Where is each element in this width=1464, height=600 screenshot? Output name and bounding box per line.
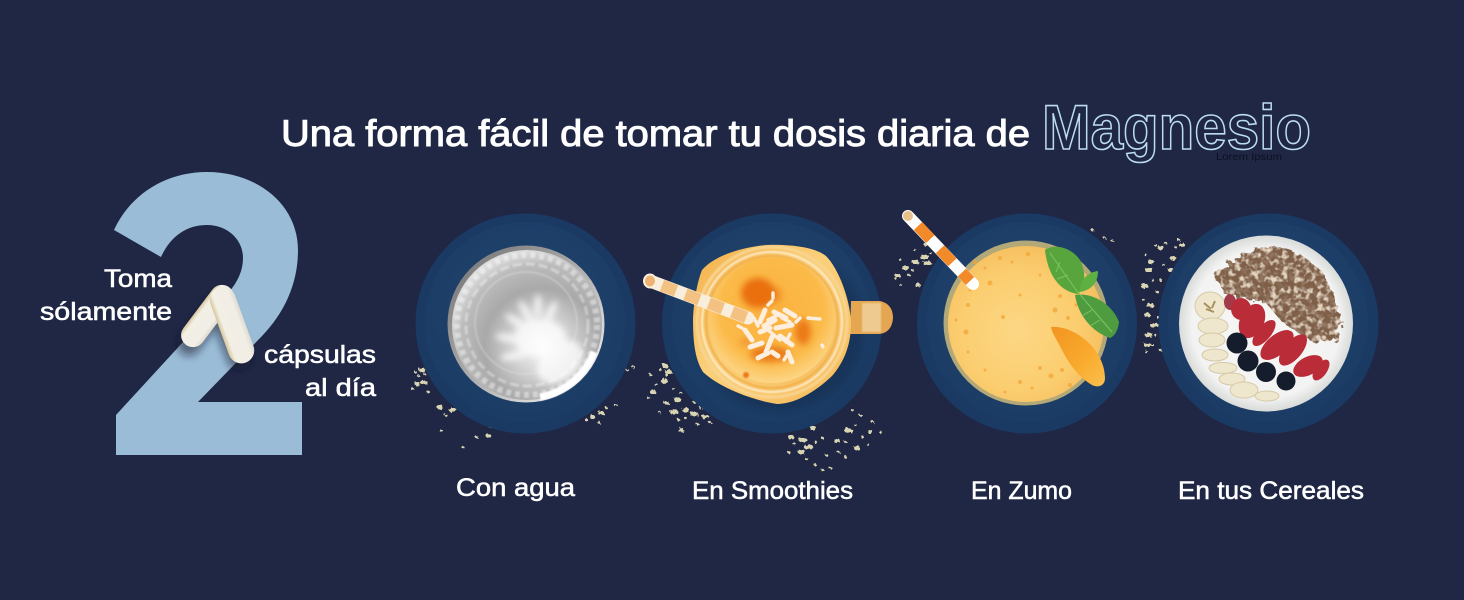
panel: con agua (416, 214, 636, 434)
icon: glass of juice (903, 211, 1119, 406)
icon: smoothie jar (644, 245, 893, 410)
icon: cereal bowl (1179, 236, 1353, 412)
scattered oat crumbs (412, 230, 1183, 470)
straw (903, 211, 973, 284)
text: Toma sólamente: Toma (104, 265, 172, 293)
blueberries (1226, 332, 1296, 390)
plate (1158, 214, 1378, 434)
label: en smoothies: En Smoothies (692, 477, 853, 505)
capsules (176, 280, 258, 367)
text: Toma sólamente (40, 265, 172, 326)
strawberries (1224, 294, 1333, 383)
bubbles (954, 252, 1078, 394)
straw (644, 274, 748, 318)
coconut flakes (738, 293, 823, 362)
placeholder caption: Lorem Ipsum (1216, 151, 1282, 163)
title text: Una forma fácil de tomar tu dosis diaria de (281, 113, 1030, 154)
plate (662, 214, 882, 434)
text: cápsulas al día: cápsulas (264, 341, 376, 369)
mint leaves (1045, 247, 1119, 338)
panel: en tus cereales (1158, 214, 1378, 434)
outlined word Magnesio: Magnesio (1042, 93, 1311, 163)
label: en zumo: En Zumo (971, 477, 1072, 505)
panel: en zumo (903, 211, 1137, 434)
label: en tus cereales: En tus Cereales (1178, 477, 1364, 505)
big number 2 with capsules (40, 172, 376, 455)
icon: glass of water (448, 246, 604, 402)
text: Toma sólamente: sólamente (40, 298, 172, 326)
numeral 2 (114, 172, 302, 455)
title (281, 93, 1311, 163)
text: cápsulas al día (264, 341, 376, 402)
plate (416, 214, 636, 434)
plate (917, 214, 1137, 434)
text: cápsulas al día: al día (305, 374, 376, 402)
granola (1214, 246, 1341, 342)
panel: en smoothies (644, 214, 893, 434)
banana slices (1195, 292, 1279, 401)
label: con agua: Con agua (456, 474, 575, 502)
peach slice (1051, 327, 1105, 386)
